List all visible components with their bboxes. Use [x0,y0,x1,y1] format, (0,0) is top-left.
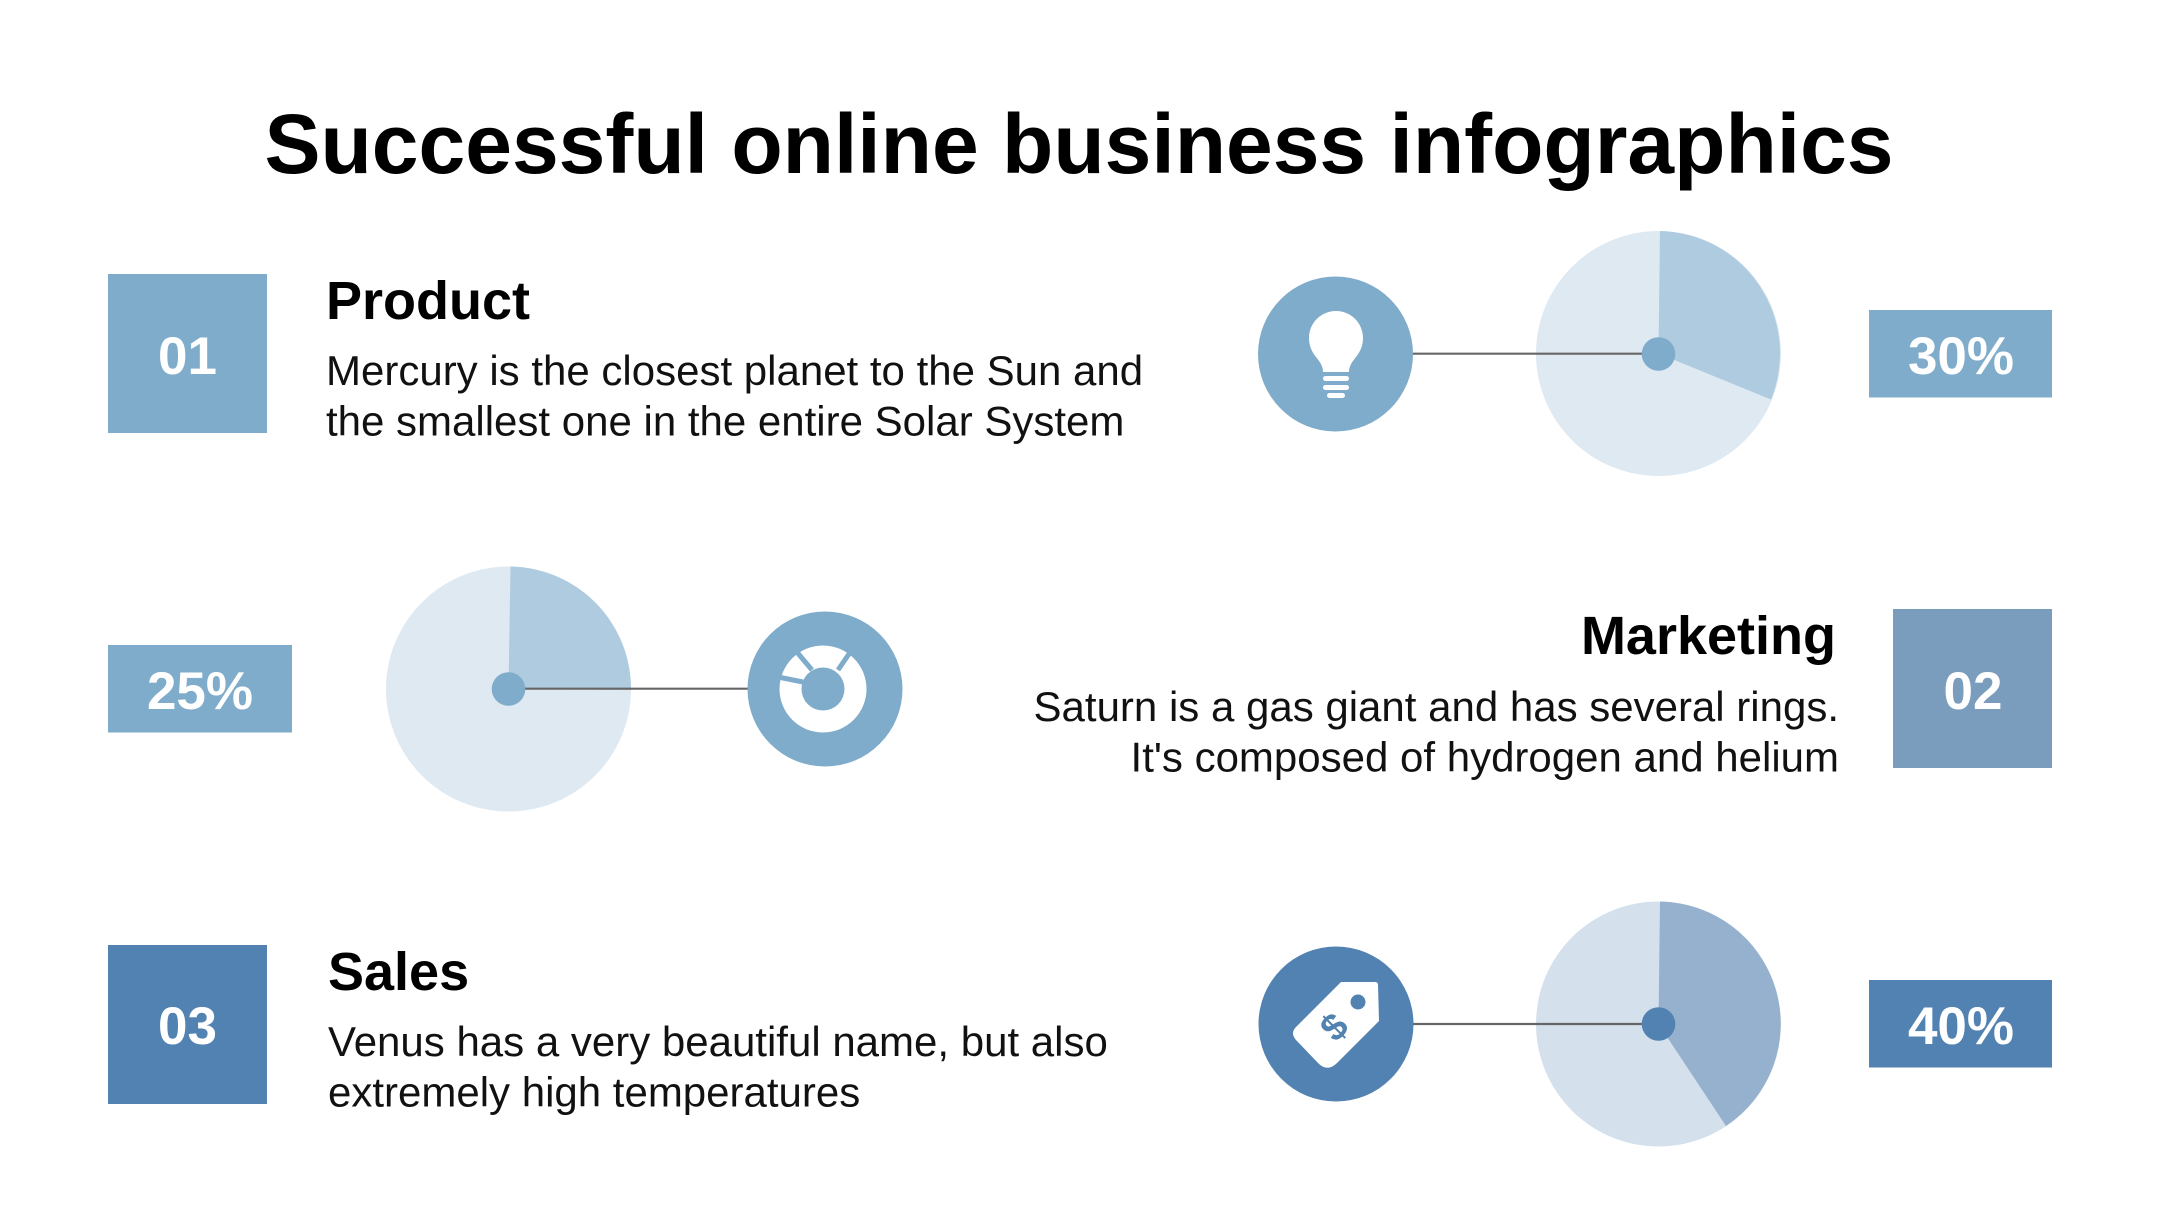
pie chart 40% [1536,902,1781,1146]
percent box 25%: 25% [147,662,253,721]
connector line [524,688,749,690]
percent box 40% [1869,980,2052,1068]
panel: sales chart [1258,902,2052,1146]
text: product description: Mercury is the closest planet to the Sun and [326,347,1143,394]
text: product description: the smallest one in the entire Solar System [326,398,1124,444]
number box 01: 01 [158,327,217,386]
panel: marketing chart [108,566,902,812]
title: Successful online business infographics [264,97,1894,191]
number box 02: 02 [1944,662,2002,721]
percent box 40%: 40% [1908,997,2014,1056]
heading: marketing: Marketing [1581,606,1836,666]
text: sales description: Venus has a very beautiful name, but also [328,1018,1108,1065]
heading: product: Product [326,271,530,331]
number box 03: 03 [158,997,217,1056]
number box 03 [108,945,267,1104]
panel: marketing [1034,606,2052,780]
panel: sales [108,942,1108,1116]
icon: light bulb [1258,276,1413,432]
heading: sales: Sales [328,942,469,1002]
panel: product chart [1258,231,2052,476]
icon: price tag [1258,946,1414,1102]
pie centre dot [1642,1007,1675,1041]
percent box 30% [1869,310,2052,398]
pie chart 25% [386,566,631,812]
pie centre dot [1642,337,1675,371]
icon: price tag: $ [1312,1005,1357,1050]
number box 01 [108,274,267,433]
text: marketing description: Saturn is a gas giant and has several rings. [1034,683,1839,730]
connector line [1413,1023,1643,1025]
text: sales description: extremely high temperatures [328,1068,860,1116]
percent box 25% [108,645,292,732]
connector line [1413,353,1643,355]
icon: donut chart [748,612,902,766]
pie chart 30% [1536,231,1781,476]
number box 02 [1893,609,2052,768]
panel: product [108,271,1143,444]
pie centre dot [492,672,525,706]
percent box 30%: 30% [1908,327,2014,386]
text: marketing description: It's composed of hydrogen and helium [1131,734,1839,780]
